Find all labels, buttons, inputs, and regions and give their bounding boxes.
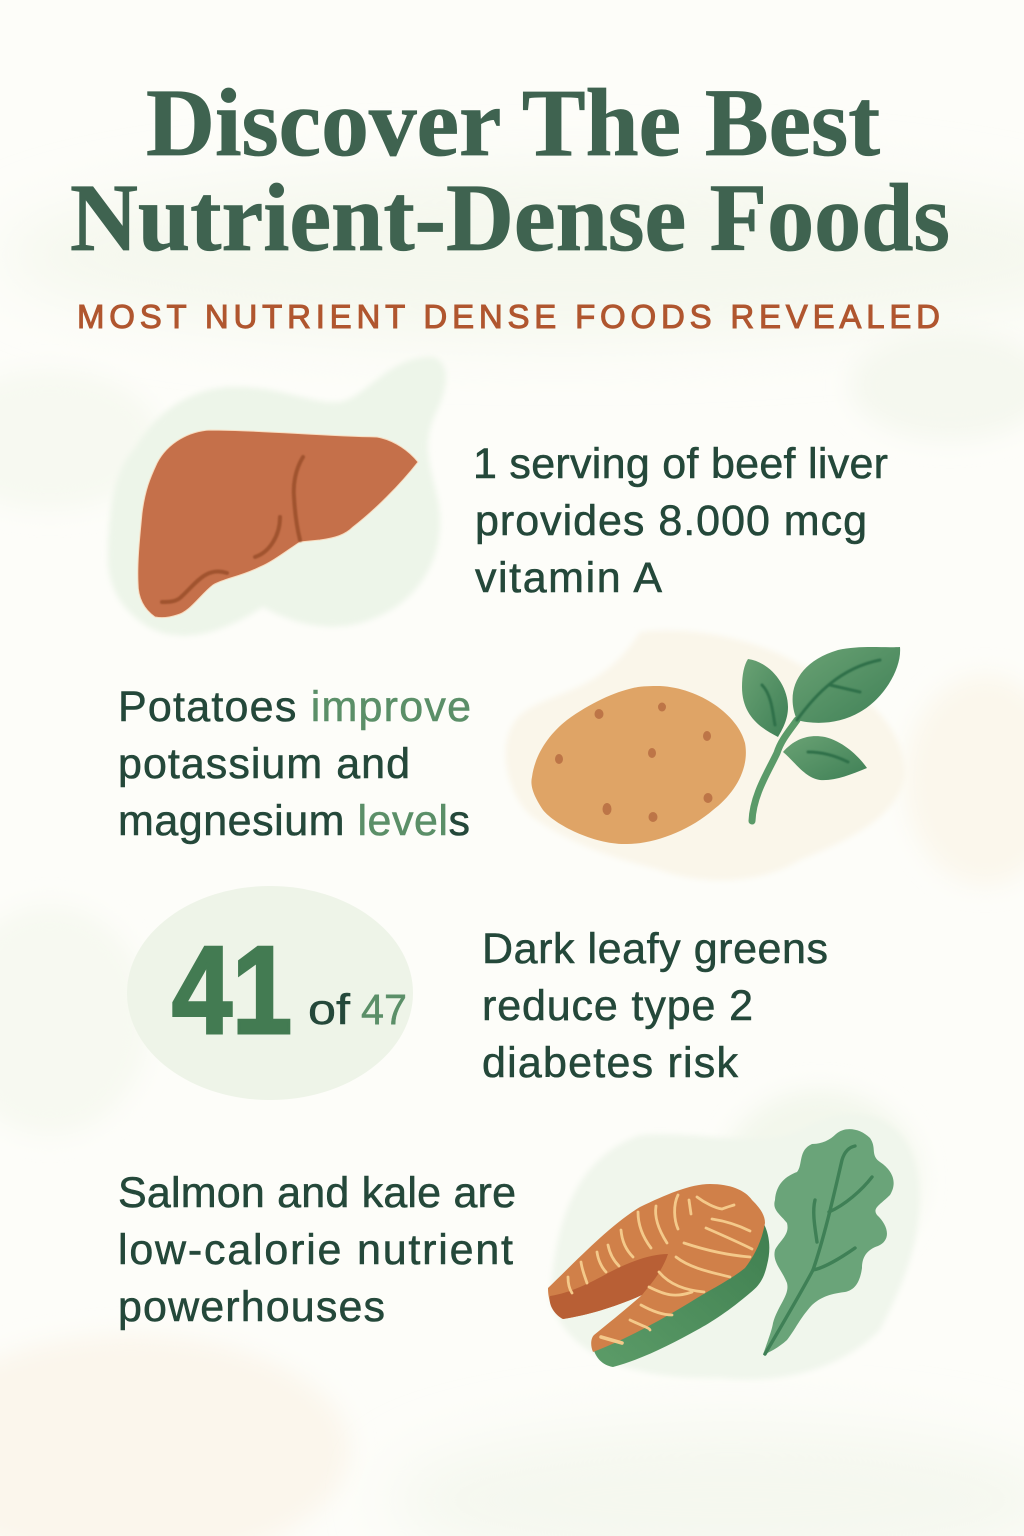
title: Nutrient-Dense Foods bbox=[70, 164, 950, 271]
stat: 41 of 47: of bbox=[308, 986, 351, 1034]
stat: 41 of 47: 41 bbox=[172, 922, 292, 1060]
text: greens fact: reduce type 2 bbox=[482, 982, 753, 1030]
icon: potato leaf sprig bbox=[742, 647, 900, 821]
subtitle: MOST NUTRIENT DENSE FOODS REVEALED bbox=[77, 298, 940, 335]
stat: 41 of 47: 47 bbox=[361, 986, 407, 1034]
text: potato fact bbox=[118, 683, 471, 845]
icon: kale leaf bbox=[763, 1129, 894, 1355]
text: greens fact bbox=[482, 925, 828, 1087]
text: salmon fact: Salmon and kale are bbox=[118, 1169, 516, 1217]
title bbox=[70, 69, 950, 271]
text: potato fact: Potatoes improve bbox=[118, 683, 471, 731]
text: salmon fact: powerhouses bbox=[118, 1283, 385, 1331]
text: greens fact: Dark leafy greens bbox=[482, 925, 828, 973]
stat blob bbox=[127, 886, 413, 1100]
icon: liver bbox=[138, 430, 418, 618]
text: liver fact: 1 serving of beef liver bbox=[473, 440, 888, 488]
panel: salmon and kale bbox=[118, 1114, 919, 1380]
panel: potatoes bbox=[118, 630, 905, 880]
panel: beef liver bbox=[108, 357, 888, 636]
panel: leafy greens bbox=[127, 886, 828, 1100]
text: liver fact: provides 8.000 mcg bbox=[475, 497, 867, 545]
title: Discover The Best bbox=[146, 69, 880, 176]
text: greens fact: diabetes risk bbox=[482, 1039, 738, 1087]
text: potato fact: potassium and bbox=[118, 740, 410, 788]
icon blob: potato background bbox=[506, 630, 905, 880]
text: potato fact: magnesium levels bbox=[118, 797, 470, 845]
icon blob: liver background bbox=[108, 357, 446, 636]
icon: salmon steak bbox=[548, 1184, 769, 1367]
icon: potato bbox=[531, 686, 746, 844]
stat: 41 of 47 bbox=[172, 922, 407, 1060]
text: salmon fact: low-calorie nutrient bbox=[118, 1226, 513, 1274]
icon blob: salmon background bbox=[550, 1114, 919, 1380]
text: salmon fact bbox=[118, 1169, 516, 1331]
text: liver fact: vitamin A bbox=[475, 554, 662, 602]
text: liver fact bbox=[473, 440, 888, 602]
